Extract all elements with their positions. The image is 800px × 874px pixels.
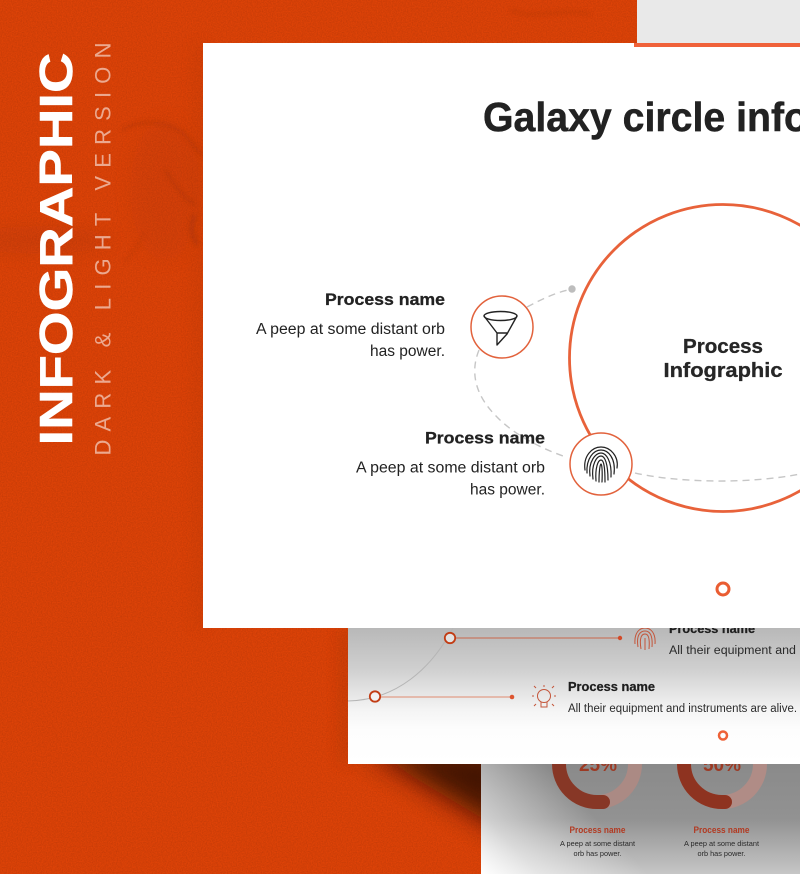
icon: funnel xyxy=(484,312,517,345)
centre label: Infographic xyxy=(664,360,782,382)
timeline row 2: Process name xyxy=(568,679,655,694)
process text 1: has power. xyxy=(370,343,445,360)
curved connector xyxy=(348,620,457,701)
grey dot xyxy=(568,285,576,293)
donut chart 50%: 50% xyxy=(703,755,741,776)
icon: fingerprint xyxy=(585,447,617,482)
donut chart 25% xyxy=(559,726,635,802)
timeline row 1: Process name xyxy=(669,621,755,636)
caption 2 xyxy=(684,825,760,858)
panel: middle timeline slide xyxy=(348,620,800,764)
icon: fingerprint small xyxy=(635,628,655,650)
process text 2 xyxy=(356,428,545,498)
process text 2: Process name xyxy=(425,428,545,448)
panel: main white slide xyxy=(203,43,800,628)
caption 1: A peep at some distant xyxy=(560,839,636,848)
timeline row 2 xyxy=(370,679,797,715)
vertical title: INFOGRAPHIC: INFOGRAPHIC xyxy=(30,52,82,446)
drop shadow under middle slide xyxy=(358,764,481,843)
donut chart 25%: 25% xyxy=(579,755,617,776)
pagination ring xyxy=(717,583,729,595)
process text 1 xyxy=(256,290,445,360)
donut chart 50% xyxy=(684,726,760,802)
centre label: Process xyxy=(683,336,763,358)
caption 2: orb has power. xyxy=(698,849,746,858)
caption 1: Process name xyxy=(570,825,626,835)
centre label xyxy=(664,336,782,382)
node: fingerprint xyxy=(570,433,632,495)
timeline row 1: All their equipment and in xyxy=(669,645,800,657)
pagination ring xyxy=(719,732,727,740)
process text 1: A peep at some distant orb xyxy=(256,321,445,338)
process text 1: Process name xyxy=(325,290,445,309)
caption 1 xyxy=(560,825,636,858)
timeline row 2: All their equipment and instruments are alive. xyxy=(568,703,797,715)
big orbit circle xyxy=(570,204,800,512)
dashed orbit paths xyxy=(475,290,800,481)
panel: top right light slide xyxy=(634,0,800,47)
icon: light bulb xyxy=(532,685,556,707)
caption 1: orb has power. xyxy=(574,849,622,858)
process text 2: A peep at some distant orb xyxy=(356,460,545,476)
panel: bottom donut slide xyxy=(481,726,800,874)
caption 2: Process name xyxy=(694,825,750,835)
process text 2: has power. xyxy=(470,482,545,498)
caption 2: A peep at some distant xyxy=(684,839,760,848)
node: funnel xyxy=(471,296,533,358)
timeline row 1 xyxy=(445,621,800,657)
vertical subtitle: DARK & LIGHT VERSION xyxy=(90,42,116,456)
